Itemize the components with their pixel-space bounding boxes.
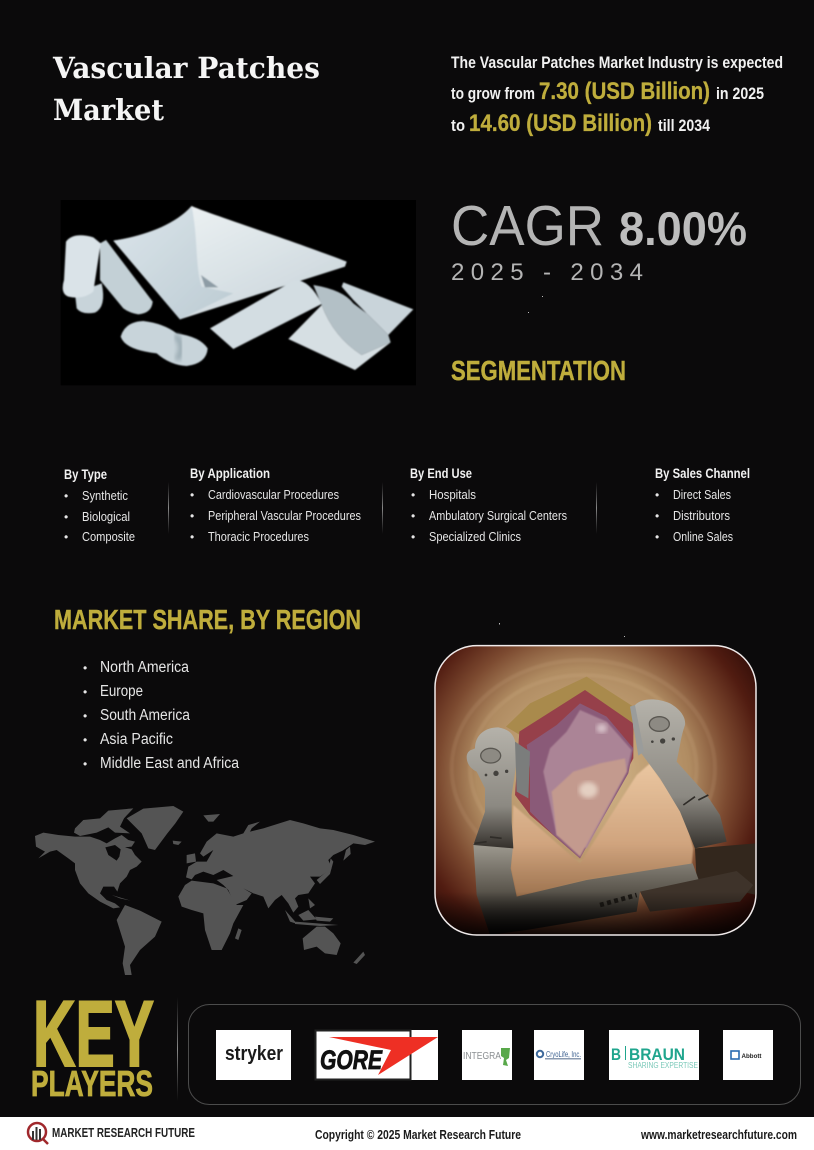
product photo: vascular patches	[61, 200, 416, 385]
segment: by sales channel	[655, 465, 750, 544]
folded patch front	[288, 305, 391, 370]
footer logo	[28, 1123, 195, 1144]
logo: cryolife: CryoLife, Inc.	[546, 1050, 581, 1059]
title: Vascular Patches	[52, 51, 320, 85]
segment: by sales channel: Direct Sales	[673, 488, 731, 502]
logo: b braun: B	[611, 1045, 621, 1064]
region list: •	[83, 661, 87, 675]
CAGR block: CAGR	[451, 194, 604, 258]
peanut patch	[121, 321, 208, 366]
caribbean	[112, 895, 131, 901]
CAGR block: 2025 - 2034	[451, 259, 643, 286]
segment: by end use: Specialized Clinics	[429, 530, 521, 544]
title: Market	[53, 93, 165, 127]
world map	[35, 806, 375, 975]
retractor hardware	[695, 843, 757, 895]
logo: gore	[315, 1030, 438, 1080]
region list: Asia Pacific	[100, 731, 173, 748]
surgery illustration	[435, 646, 757, 935]
segment: by application: Cardiovascular Procedures	[208, 488, 339, 502]
key players heading: KEY	[33, 981, 154, 1086]
logo: abbott	[723, 1030, 773, 1080]
segment: by application	[190, 465, 361, 544]
australia	[303, 927, 341, 955]
logo: stryker: stryker	[225, 1043, 283, 1065]
market forecast text: till 2034	[658, 117, 711, 135]
region list	[83, 659, 239, 772]
greenland	[127, 806, 183, 850]
africa	[178, 881, 243, 950]
logo: cryolife	[534, 1030, 584, 1080]
logo: abbott: Abbott	[742, 1053, 762, 1060]
segment: by type: •	[64, 489, 68, 503]
segment: by end use	[410, 465, 567, 544]
canadian arctic	[74, 808, 133, 836]
market forecast text: 7.30 (USD Billion)	[539, 78, 710, 105]
logo: gore: GORE	[320, 1045, 383, 1075]
heart	[527, 703, 633, 858]
region list: South America	[100, 707, 190, 724]
segment: by type: Biological	[82, 510, 130, 524]
segment: by type: •	[64, 530, 68, 544]
logo: integra: INTEGRA	[463, 1051, 501, 1062]
logo: b braun: BRAUN	[629, 1045, 685, 1064]
south america	[117, 905, 162, 975]
title	[52, 51, 320, 127]
right sheet	[342, 282, 413, 335]
segment: by end use: By End Use	[410, 465, 472, 481]
segment: by sales channel: •	[655, 488, 659, 502]
logo: b braun: SHARING EXPERTISE	[628, 1061, 698, 1070]
skin	[511, 763, 693, 897]
long strip patch	[100, 240, 153, 314]
copyright: Copyright © 2025 Market Research Future	[315, 1127, 521, 1142]
key players heading: PLAYERS	[31, 1063, 153, 1104]
segment: by sales channel: •	[655, 530, 659, 544]
segment: by application: Peripheral Vascular Procedures	[208, 509, 361, 523]
rounded small patches	[75, 283, 103, 313]
indonesia and philippines	[285, 898, 338, 926]
market forecast text: to	[451, 117, 465, 135]
footer	[0, 1117, 814, 1150]
segment: by end use: •	[411, 488, 415, 502]
segment: by application: By Application	[190, 465, 270, 481]
region list: Middle East and Africa	[100, 755, 239, 772]
hudson bay	[105, 845, 121, 861]
heading: market share by region: MARKET SHARE, BY REGION	[54, 604, 361, 635]
segment: by end use: Hospitals	[429, 488, 476, 502]
logo: b braun	[609, 1030, 699, 1080]
segment: by type: Synthetic	[82, 489, 128, 503]
footer logo: MARKET RESEARCH FUTURE	[52, 1126, 195, 1140]
key players panel	[188, 1004, 800, 1104]
market forecast text: in 2025	[716, 85, 764, 103]
key players heading	[31, 981, 154, 1104]
segment: by sales channel: Distributors	[673, 509, 730, 523]
region list: North America	[100, 659, 189, 676]
logo: stryker	[216, 1030, 291, 1080]
segment: by sales channel: By Sales Channel	[655, 465, 750, 481]
iceland	[173, 841, 182, 845]
upper wound edge	[506, 677, 633, 735]
specks	[499, 296, 625, 637]
region list: Europe	[100, 683, 143, 700]
region list: •	[83, 733, 87, 747]
region list: •	[83, 685, 87, 699]
rectangle patch	[210, 280, 322, 349]
madagascar	[235, 928, 242, 940]
CAGR block	[451, 194, 747, 286]
segment: by sales channel: Online Sales	[673, 530, 733, 544]
region list: •	[83, 709, 87, 723]
segment: by end use: •	[411, 530, 415, 544]
heading: segmentation: SEGMENTATION	[451, 355, 626, 386]
segment: by type: Composite	[82, 530, 135, 544]
region list: •	[83, 757, 87, 771]
segment: by application: •	[190, 509, 194, 523]
eurasia	[186, 820, 375, 913]
segment: by application: •	[190, 488, 194, 502]
market forecast text	[451, 54, 783, 137]
logo: integra	[462, 1030, 512, 1080]
segment: by type: •	[64, 510, 68, 524]
folded patch shaded side	[313, 285, 391, 355]
japan	[317, 858, 333, 884]
market forecast text: 14.60 (USD Billion)	[469, 110, 652, 137]
new zealand	[353, 952, 365, 964]
CAGR block: 8.00%	[619, 202, 747, 255]
segment: by sales channel: •	[655, 509, 659, 523]
segment: by application: •	[190, 530, 194, 544]
segment: by type: By Type	[64, 466, 107, 482]
market forecast text: to grow from	[451, 85, 535, 103]
segment: by type	[64, 466, 135, 544]
large patch	[113, 206, 347, 319]
segment: by application: Thoracic Procedures	[208, 530, 309, 544]
uk	[187, 853, 196, 863]
novaya zemlya	[243, 822, 260, 835]
north america	[35, 833, 142, 908]
kamchatka	[343, 847, 351, 861]
svalbard	[203, 814, 220, 822]
segment: by end use: •	[411, 509, 415, 523]
segment: by end use: Ambulatory Surgical Centers	[429, 509, 567, 523]
